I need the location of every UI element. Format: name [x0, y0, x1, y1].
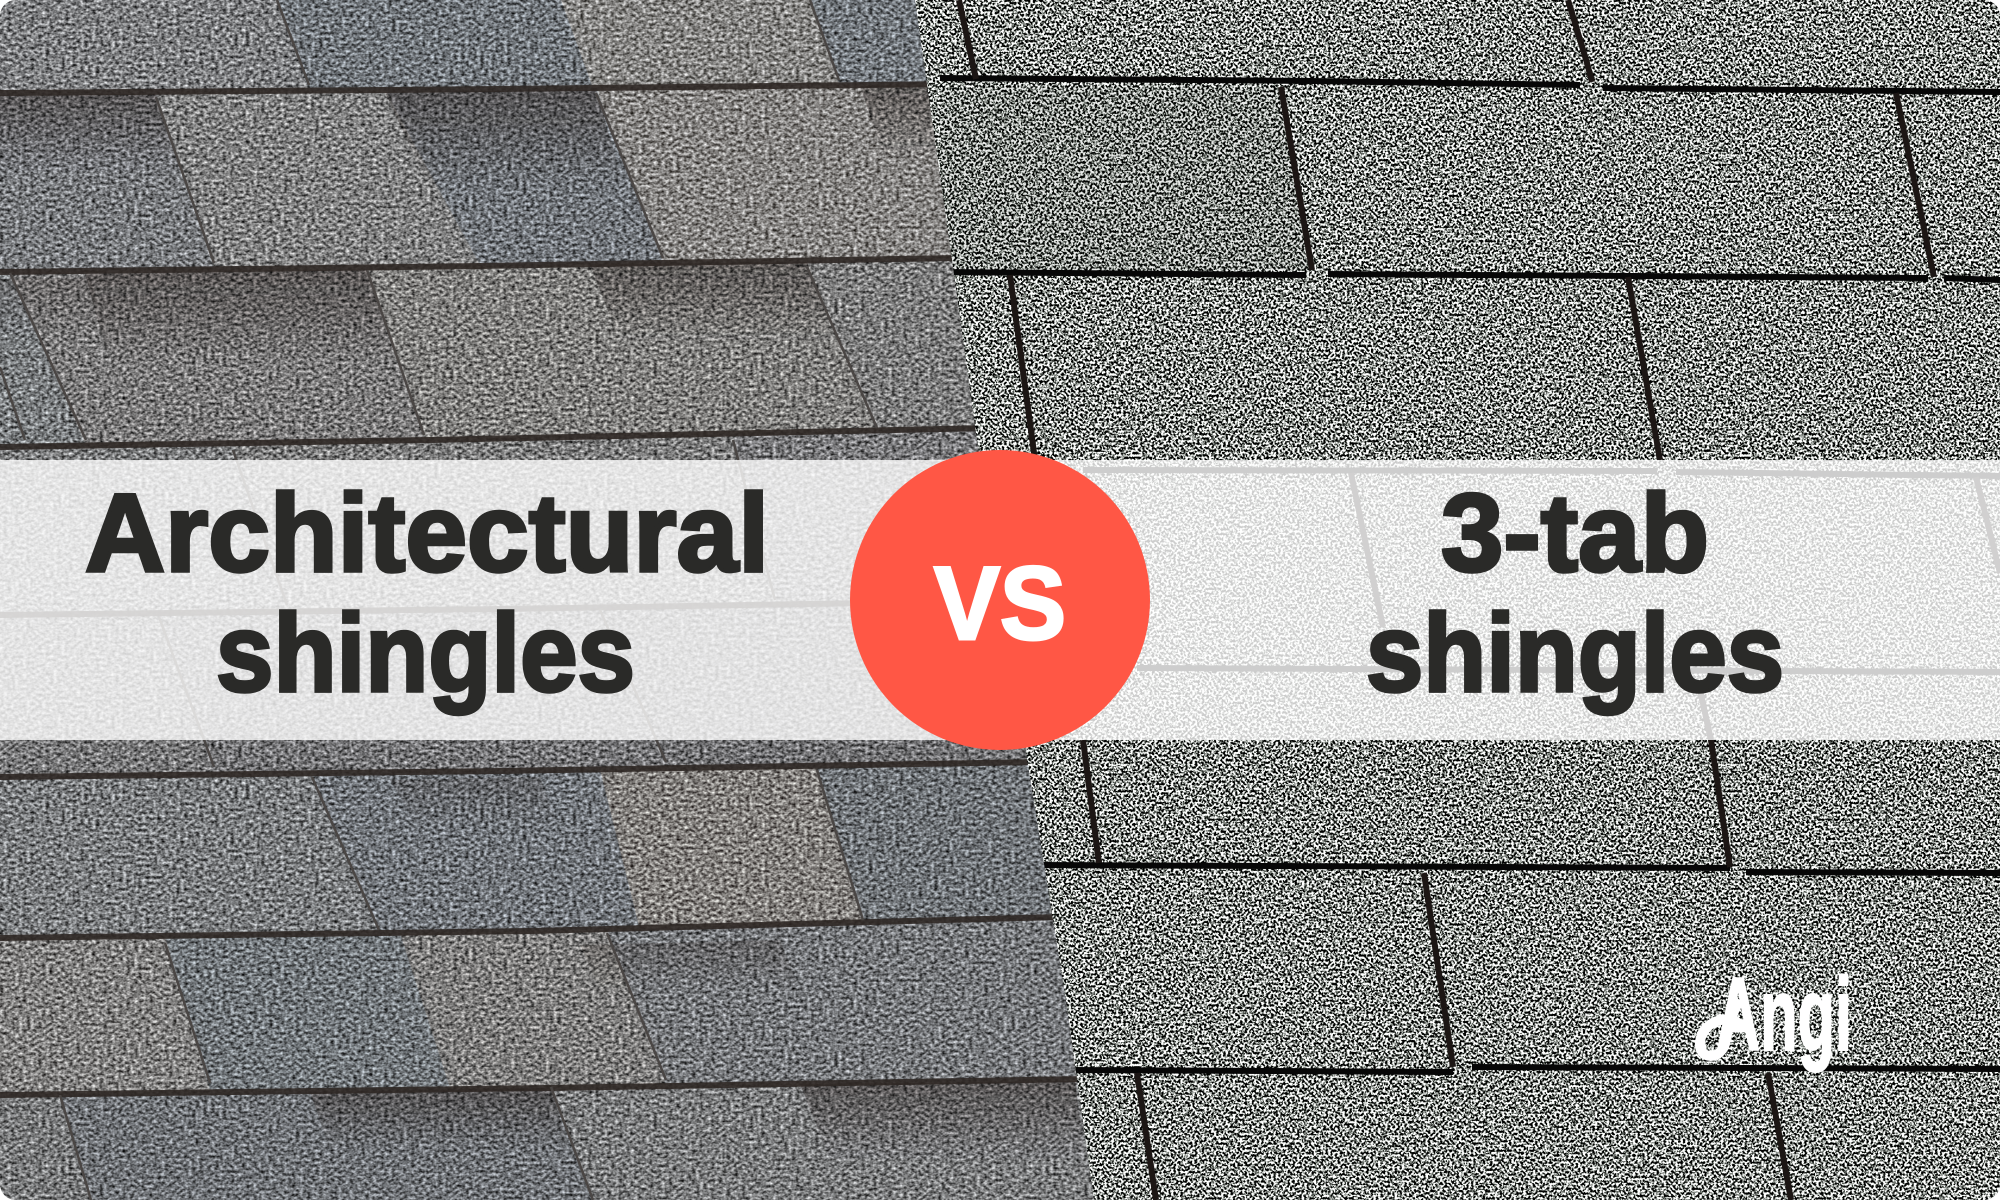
heading: Architectural shingles: shingles — [216, 592, 635, 715]
heading: 3-tab shingles: shingles — [1366, 592, 1784, 715]
photo: architectural shingles — [0, 0, 1100, 1200]
photo: 3-tab shingles — [900, 0, 2000, 1200]
vs badge — [850, 450, 1150, 750]
heading: Architectural shingles: Architectural — [85, 472, 769, 595]
logo: Angi — [1700, 957, 1852, 1073]
heading: 3-tab shingles: 3-tab — [1441, 472, 1709, 595]
heading: Architectural shingles — [85, 472, 769, 715]
logo: Angi: Angi — [1716, 957, 1852, 1073]
heading: 3-tab shingles — [1366, 472, 1784, 715]
vs badge: VS — [934, 546, 1066, 662]
translucent title band — [0, 460, 2000, 740]
